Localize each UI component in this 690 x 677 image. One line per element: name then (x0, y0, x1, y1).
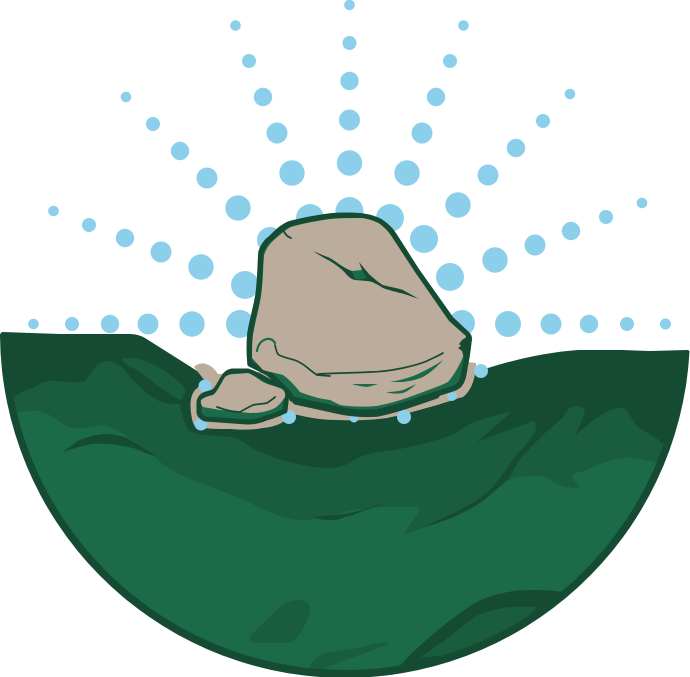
large rock: right edge notch (458, 335, 470, 358)
terrain: bottom patch (309, 642, 388, 669)
large rock: crack green core (352, 270, 367, 279)
large rock: tan face (252, 218, 466, 407)
ground: layered terrain (0, 358, 690, 677)
terrain: left dark sliver (63, 434, 157, 457)
large rock: green streaks (352, 360, 443, 394)
terrain: bottom right dark arch (400, 590, 561, 666)
terrain: dark fold (424, 414, 565, 528)
large rock (249, 215, 470, 413)
terrain: bottom right inner patch (420, 607, 538, 658)
large rock: main crack (313, 251, 419, 299)
radiating blue dots (28, 0, 671, 338)
terrain: center dark sliver (313, 502, 388, 520)
small rock: tan face (201, 373, 285, 413)
terrain: upper left ridge patch (122, 358, 185, 400)
small rock (199, 371, 286, 422)
small dots around the rocks (194, 364, 488, 430)
small rock: outline and green base (199, 371, 286, 422)
large rock: thick bottom outline (296, 395, 436, 413)
large rock: outline and green base (249, 215, 469, 412)
tan pool under the rocks (190, 362, 476, 430)
terrain: rounded patch (250, 600, 310, 643)
large rock: left green arc (257, 339, 275, 351)
terrain: light foreground (0, 411, 690, 677)
ground: dark base (0, 332, 690, 677)
large rock: upper corner nick (283, 228, 291, 238)
large rock: long base crack (275, 345, 443, 376)
small rock: crack (217, 397, 275, 412)
terrain: mid layer (14, 361, 664, 535)
